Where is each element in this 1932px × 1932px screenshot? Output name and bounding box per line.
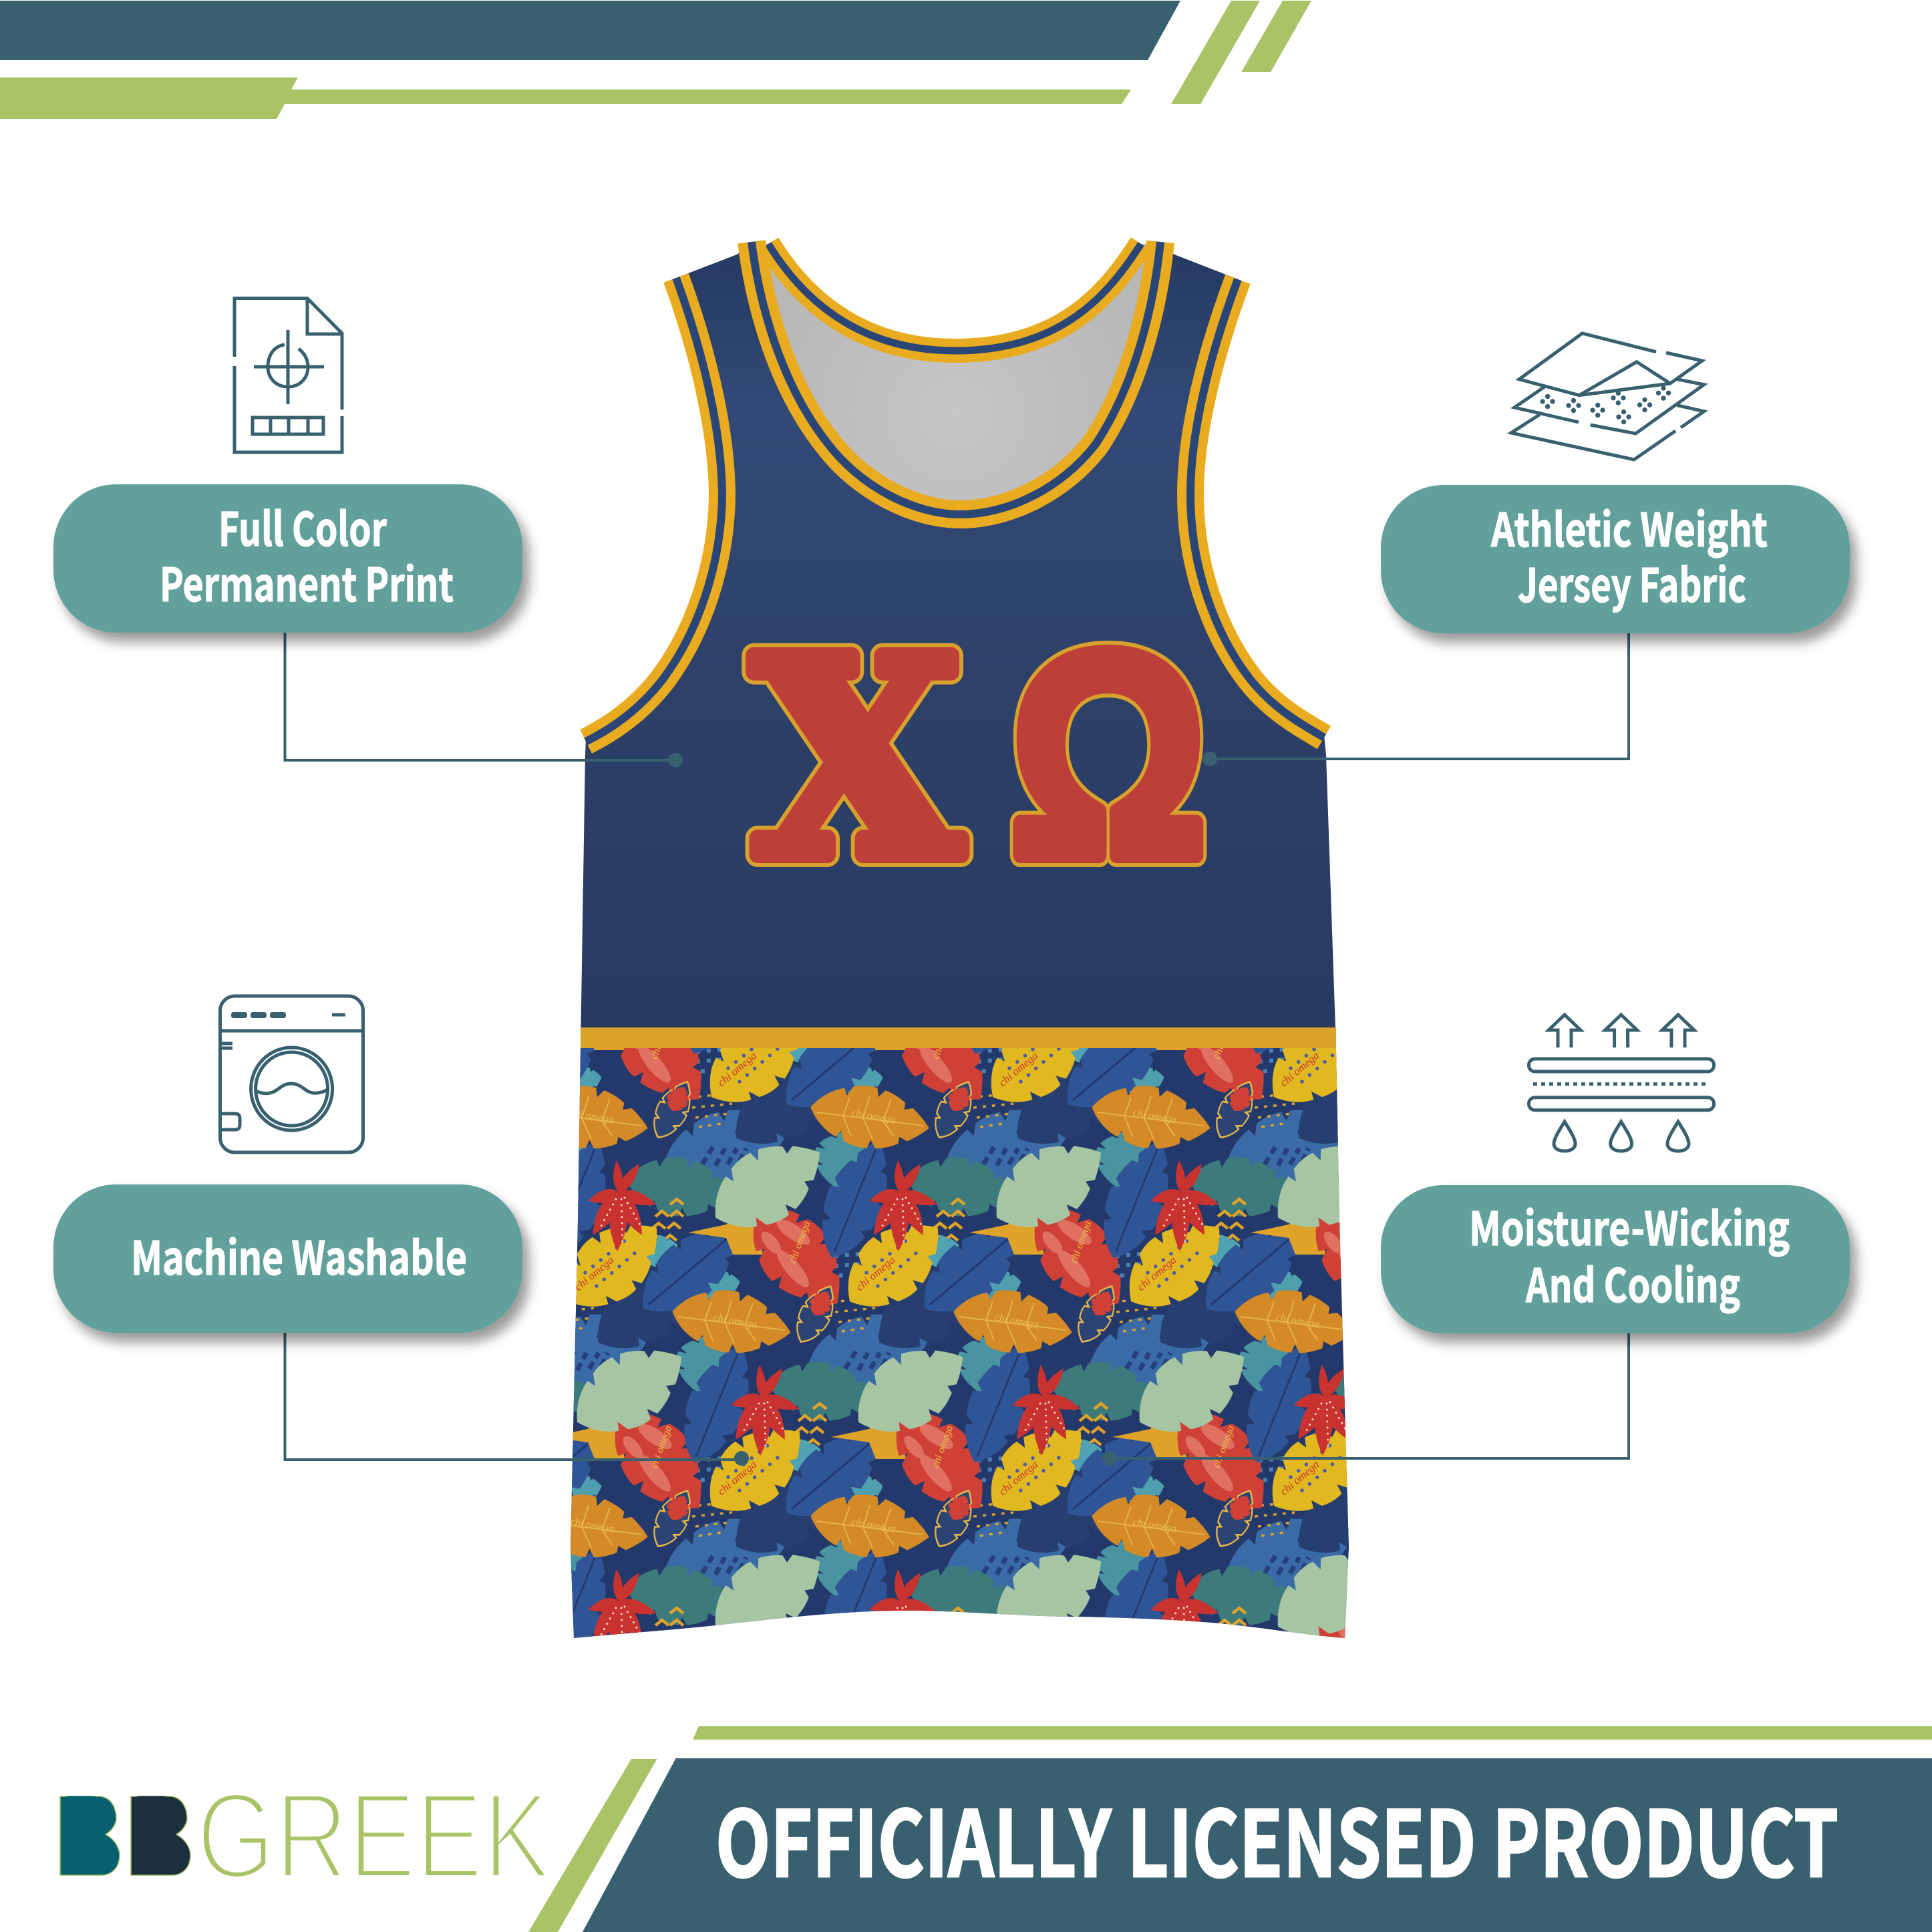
callout: athletic weight jersey fabric: Athletic Weight [1490, 493, 1768, 560]
logo mark: second B [131, 1772, 190, 1899]
icon: print document with crosshair [234, 298, 342, 452]
callout: full color permanent print: Permanent Print [160, 548, 454, 615]
green footer slash [528, 1759, 657, 1932]
dark footer panel [583, 1758, 1932, 1932]
callout: machine washable: Machine Washable [131, 1221, 467, 1288]
icon: washing machine [220, 996, 363, 1152]
callout: moisture wicking and cooling: And Cooling [1525, 1249, 1740, 1315]
gold waist band [581, 1027, 1336, 1048]
jersey upper body [581, 245, 1336, 1048]
footer banner [528, 1726, 1932, 1932]
connector: full color print [285, 633, 683, 768]
logo mark: second B: B [132, 1772, 186, 1899]
green slash long [1171, 1, 1260, 104]
callout: full color permanent print: Full Color [218, 492, 387, 559]
right armhole binding [1190, 279, 1324, 738]
top header bars [0, 1, 1311, 119]
connector: athletic weight [1202, 633, 1629, 766]
icon: moisture wicking layers [1528, 1015, 1714, 1151]
greek letter omega: Ω [1010, 593, 1206, 917]
callout: machine washable [53, 1184, 522, 1333]
green footer bar [693, 1726, 1932, 1740]
left armhole binding [586, 278, 722, 742]
front neck binding [752, 242, 1160, 514]
callout: full color permanent print [53, 484, 522, 633]
callout: moisture wicking and cooling: Moisture-Wicking [1469, 1192, 1790, 1259]
greek letter chi: Χ [753, 599, 963, 919]
greek letter omega: Ω [1010, 593, 1206, 917]
connector: moisture wicking [1102, 1333, 1629, 1466]
callout: athletic weight jersey fabric: Jersey Fabric [1518, 548, 1746, 615]
back neck binding [768, 244, 1141, 351]
logo mark: first B: B [61, 1772, 115, 1899]
jersey [126, 242, 1788, 1741]
connector: machine washable [285, 1333, 749, 1466]
dark header bar [0, 1, 1180, 60]
logo mark: first B [60, 1772, 120, 1899]
logo wordmark: GREEK [196, 1767, 550, 1904]
jersey inner back [752, 244, 1160, 514]
icon: fabric layers [1511, 333, 1704, 460]
callout: athletic weight jersey fabric [1381, 485, 1850, 633]
logo: BB Greek [60, 1767, 550, 1904]
callout: moisture wicking and cooling [1381, 1185, 1850, 1333]
green header bar [0, 77, 1131, 119]
greek letter chi: Χ [753, 599, 963, 919]
green slash short [1241, 1, 1311, 72]
leaf print panel [571, 1048, 1349, 1638]
